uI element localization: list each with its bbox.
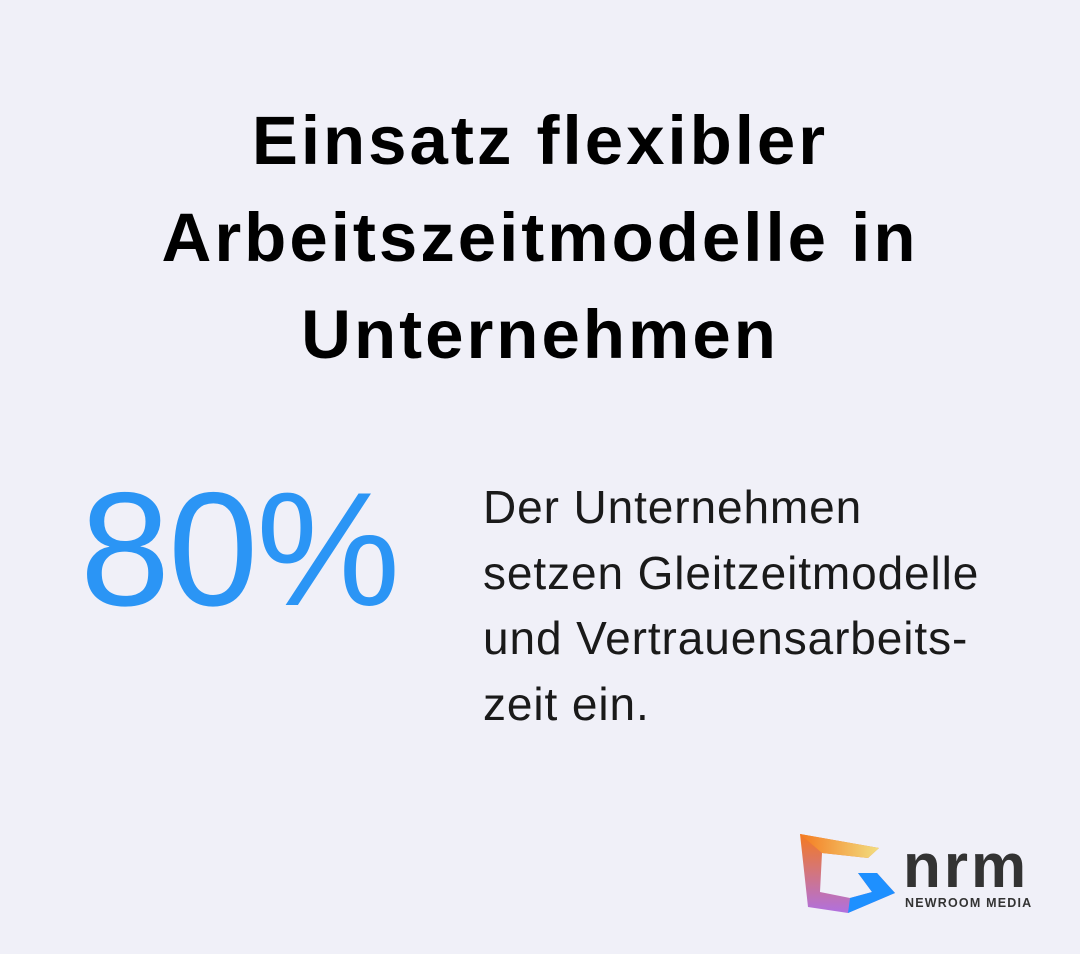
title: Arbeitszeitmodelle in [162,199,918,276]
title: Einsatz flexibler [252,102,828,179]
logo subtitle: NEWROOM MEDIA [905,896,1032,910]
description text: setzen Gleitzeitmodelle [483,546,979,598]
logo: nrm newroom media [800,832,1032,913]
logo wordmark: nrm [903,832,1029,901]
description text: Der Unternehmen [483,481,862,533]
description text [483,481,979,730]
description text: und Vertrauensarbeits- [483,612,968,664]
big stat: 80% [80,459,398,640]
icon: logo mark [800,834,895,913]
title [162,102,918,373]
description text: zeit ein. [483,678,650,730]
title: Unternehmen [301,296,779,373]
